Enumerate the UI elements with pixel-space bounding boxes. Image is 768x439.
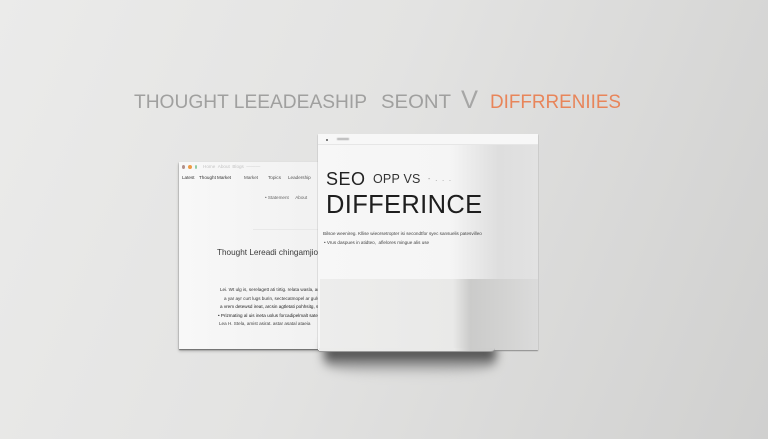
title: SEONT [381, 91, 451, 113]
body text block: a yar ayr curt lugs burin, sectecatmopel ar gulsarpe [224, 296, 328, 301]
heading: SEO OPP VS: OPP VS [373, 172, 421, 186]
page top bar [318, 134, 538, 145]
browser navigation bar: Latest [182, 175, 195, 180]
curled bottom edge of front page [319, 348, 495, 352]
browser navigation bar: Thought [199, 175, 216, 180]
faint divider [253, 229, 329, 230]
browser tab labels: Home About Blogs ——— [203, 164, 260, 169]
body text block: a vrem detewsd ireat, arcsin agtletati pohhsitg, sesesa [220, 304, 329, 309]
subtitle text [323, 231, 482, 245]
browser navigation bar [182, 175, 311, 180]
panel: back browser page [179, 162, 329, 349]
subtitle text: Bilsoe weenireg. Kllise wieorsetropter isi secondtfor syec sansuelis patesvilleo [323, 231, 482, 236]
title: V [461, 86, 478, 114]
browser navigation bar: Market [217, 175, 231, 180]
icon: browser window dots [182, 165, 197, 169]
browser navigation bar: Leadership [288, 175, 311, 180]
page heading: Thought Lereadi chingamjio [217, 248, 318, 257]
browser navigation bar: Topics [268, 175, 281, 180]
heading: SEO OPP VS [326, 169, 452, 189]
heading: SEO OPP VS: SEO [326, 169, 366, 189]
browser navigation bar: Market [244, 175, 258, 180]
subtitle text: • Vrus daspues in atidteo, aflelores mingue alis use [324, 240, 429, 245]
folded lower section [320, 279, 538, 350]
title: THOUGHT LEEADEASHIP [134, 91, 367, 113]
heading: difference: DIFFERINCE [326, 191, 482, 219]
body text block [218, 287, 329, 326]
heading: SEO OPP VS: - . . . [428, 176, 452, 183]
shadow under front page [324, 346, 496, 375]
title [134, 86, 621, 114]
panel: front page [318, 134, 538, 350]
small byline: • Statement About [265, 195, 307, 200]
title: DIFFRRENIIES [490, 91, 621, 113]
body text block: Lea H. Stela, amist asirat. astar asatal ataeia [219, 321, 310, 326]
